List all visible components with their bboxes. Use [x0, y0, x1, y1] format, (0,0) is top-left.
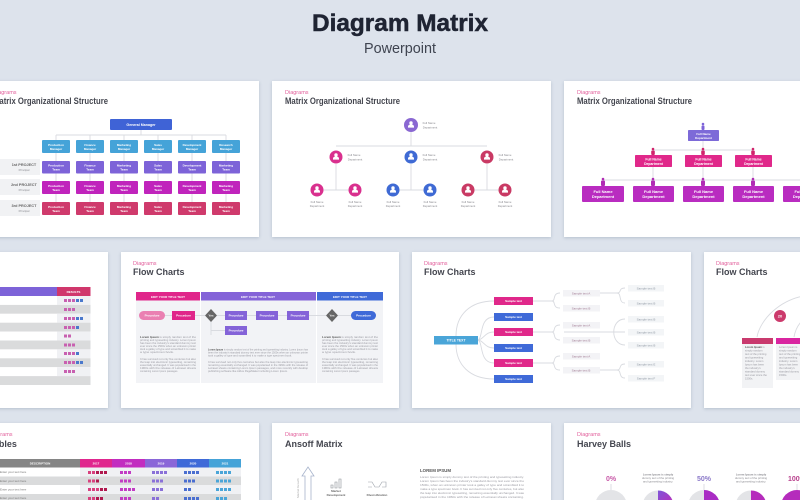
- column two: and typesetting: [779, 356, 798, 360]
- sample text level three: Sample text F: [637, 376, 655, 380]
- row labels: Principal: [19, 209, 30, 213]
- second level nodes: [330, 150, 514, 164]
- subtitle: Powerpoint: [364, 41, 436, 57]
- sample text level three: Sample text B: [637, 330, 655, 334]
- column one: 1500s.: [745, 376, 753, 380]
- sample boxes pink: Sample text: [505, 299, 522, 303]
- text block left: [140, 335, 197, 373]
- table rows: Enter your text here: [0, 479, 27, 483]
- lorem ipsum text: [420, 468, 525, 499]
- ball captions: dummy text of the printing: [735, 476, 768, 480]
- axis label: Market Growth: [296, 478, 300, 498]
- text block right: It has survived not only five centuries but also: [322, 357, 379, 361]
- text block right: essentially unchanged. It was popularised in the: [322, 363, 378, 367]
- third level nodes: Full Name: [349, 200, 362, 204]
- flow decision diamond: Yes: [208, 314, 214, 318]
- third project row: Team: [120, 209, 128, 213]
- manager row: Research: [219, 143, 233, 147]
- text block left: It has survived not only five centuries but also: [140, 357, 197, 361]
- text block right: a type specimen book.: [322, 350, 356, 354]
- general manager box: [110, 119, 172, 130]
- general manager box: General Manager: [126, 123, 156, 127]
- sample text level three: Sample text B: [637, 286, 655, 290]
- first project row: Team: [86, 168, 94, 172]
- second project row: Team: [154, 188, 162, 192]
- first project row: Marketing: [117, 164, 131, 168]
- manager row: Manager: [152, 147, 165, 151]
- text block left: has been the industry's standard dummy text: [140, 341, 196, 345]
- second project row: Team: [222, 188, 230, 192]
- second level boxes: [635, 155, 772, 167]
- second project row: [42, 181, 240, 194]
- manager row: Production: [48, 143, 64, 147]
- column two: industry. Lorem: [779, 359, 798, 363]
- heading: Harvey Balls: [577, 439, 631, 449]
- heading: Flow Charts: [716, 267, 768, 277]
- third project row: Production: [48, 205, 64, 209]
- title text box: [434, 336, 478, 344]
- text block middle: publishing software like Aldus PageMaker including Lorem Ipsum.: [208, 369, 288, 373]
- second project row: Team: [52, 188, 60, 192]
- column two: Ipsum has been: [779, 362, 799, 366]
- ball captions: [642, 472, 768, 484]
- second project row: Team: [86, 188, 94, 192]
- text block left: containing Lorem Ipsum passages.: [140, 369, 178, 373]
- second project row: Marketing: [117, 184, 131, 188]
- table header: RESULTS: [67, 290, 80, 294]
- heading: Flow Charts: [424, 267, 476, 277]
- sample boxes pink: Sample text: [505, 361, 522, 365]
- heading: Ansoff Matrix: [285, 439, 343, 449]
- swimlane headers: EDIT YOUR TITLE TEXT: [333, 295, 367, 299]
- third level boxes: Department: [692, 194, 715, 199]
- panel: circular org chart slide: [272, 81, 551, 237]
- flow process pink: [172, 311, 195, 320]
- manager row: Manager: [220, 147, 233, 151]
- third level nodes: Department: [310, 204, 325, 208]
- panel: flow chart swimlane slide: [121, 252, 399, 408]
- sample boxes blue: Sample text: [505, 346, 522, 350]
- column one: text ever since the: [745, 373, 767, 377]
- panel: flow chart swimlane slide: Diagrams: [133, 261, 157, 267]
- heading: Matrix Organizational Structure: [285, 96, 400, 106]
- table rows: [0, 296, 90, 385]
- text block middle: It has survived not only five centuries but also the leap into electronic typesetting: [208, 360, 309, 364]
- second project row: Sales: [154, 184, 162, 188]
- table header: 2019: [158, 462, 165, 466]
- manager row: Development: [183, 143, 201, 147]
- manager row: [42, 140, 240, 153]
- ball tick marks: [611, 484, 797, 490]
- third level nodes: Full Name: [499, 200, 512, 204]
- column two: standard dummy: [779, 370, 800, 374]
- ball captions: Lorem Ipsum is simply: [736, 472, 767, 476]
- numbered circle: 20: [778, 314, 783, 318]
- text block left: a type specimen book.: [140, 350, 174, 354]
- row labels: 3rd PROJECT: [12, 204, 37, 208]
- second level boxes: Full Name: [695, 158, 712, 162]
- flow end pill: Procedure: [356, 314, 371, 318]
- text block middle: Lorem Ipsum is simply random text of the printing and typesetting industry. Lorem Ipsum has: [208, 348, 309, 352]
- second level boxes: Department: [744, 162, 764, 166]
- column one: and typesetting: [745, 356, 764, 360]
- text block right: Lorem Ipsum is simply random text of the: [322, 335, 379, 339]
- text block right: [322, 335, 379, 373]
- diversification icon: [367, 482, 387, 497]
- first project row: Team: [154, 168, 162, 172]
- text block left: the leap into electronic typesetting, remaining: [140, 360, 197, 364]
- heading: Matrix Organizational Structure: [577, 96, 692, 106]
- lorem ipsum text: popularised in the 1960s with the release of Letraset sheets containing.: [420, 495, 524, 499]
- third project row: Team: [188, 209, 196, 213]
- panel: ansoff matrix slide: [272, 423, 551, 500]
- third project row: Team: [222, 209, 230, 213]
- second project row: Finance: [84, 184, 96, 188]
- manager row: Manager: [50, 147, 63, 151]
- sample text level two: Sample text B: [572, 338, 590, 342]
- sample boxes blue: Sample text: [505, 377, 522, 381]
- text block right: ever since the 1500s when an unknown printer: [322, 344, 378, 348]
- panel: circular org chart slide: Diagrams: [285, 90, 309, 96]
- third level nodes: Full Name: [311, 200, 324, 204]
- lorem ipsum text: the leap into electronic typesetting, remaining essentially unchanged. It was: [420, 491, 525, 495]
- manager row: Manager: [186, 147, 199, 151]
- third level nodes: [310, 184, 513, 208]
- lorem ipsum text: LOREM IPSUM: [420, 468, 452, 473]
- sample text level two: Sample text B: [572, 368, 590, 372]
- column two: simply random: [779, 348, 797, 352]
- second level nodes: Department: [423, 158, 438, 162]
- third level nodes: Full Name: [424, 200, 437, 204]
- tree connector lines: [323, 132, 499, 190]
- text block middle: [208, 348, 309, 373]
- text block right: 1960s with the release of Letraset sheets: [322, 366, 379, 370]
- table header: [0, 459, 241, 468]
- flow start pill: Procedure: [145, 314, 160, 318]
- sample text level two: Sample text A: [572, 354, 590, 358]
- ball captions: Lorem Ipsum is simply: [643, 472, 674, 476]
- panel: harvey balls slide: [564, 423, 800, 500]
- third level boxes: Full Name: [593, 189, 613, 194]
- sample boxes pink: Sample text: [505, 330, 522, 334]
- swimlane headers: EDIT YOUR TITLE TEXT: [151, 295, 185, 299]
- top box: Full Name: [696, 132, 711, 136]
- lorem ipsum text: 1500s, when an unknown printer took a galley of type and scrambled it to: [420, 483, 525, 487]
- third project row: Marketing: [219, 205, 233, 209]
- column one: industry. Lorem: [745, 359, 764, 363]
- second level nodes: Department: [348, 158, 363, 162]
- row labels: Principal: [19, 168, 30, 172]
- second level boxes: Department: [644, 162, 664, 166]
- flow decision diamond two: Yes: [329, 314, 335, 318]
- panel: results table slide: [0, 252, 108, 408]
- table header: 2018: [125, 462, 132, 466]
- table rows: Enter your text here: [0, 488, 27, 492]
- ball captions: and typesetting industry.: [736, 480, 766, 484]
- flow process purple: Procedure: [260, 314, 275, 318]
- third level nodes: Department: [498, 204, 513, 208]
- column two: 1500s.: [779, 373, 787, 377]
- second project row: Production: [48, 184, 64, 188]
- second project row: Team: [188, 188, 196, 192]
- panel: box org chart slide: [564, 81, 800, 237]
- swimlane headers: [136, 292, 383, 300]
- sample text level two: [563, 290, 600, 374]
- flow process purple: Procedure: [229, 328, 244, 332]
- third level boxes: Full Name: [644, 189, 664, 194]
- ball captions: and typesetting industry.: [643, 480, 673, 484]
- first project row: Team: [120, 168, 128, 172]
- panel: ansoff matrix slide: Diagrams: [285, 432, 309, 438]
- diversification icon: Diversification: [367, 493, 387, 497]
- connector lines: [603, 141, 800, 182]
- third project row: Team: [86, 209, 94, 213]
- flow process purple: [225, 311, 309, 335]
- third project row: Finance: [84, 205, 96, 209]
- first project row: Marketing: [219, 164, 233, 168]
- manager row: Marketing: [117, 143, 131, 147]
- sample text level two: Sample text A: [572, 324, 590, 328]
- row labels: [0, 159, 40, 216]
- text block left: Lorem Ipsum is simply random text of the: [140, 335, 197, 339]
- third project row: Team: [154, 209, 162, 213]
- flow decision diamond: [205, 309, 217, 322]
- panel: harvey balls slide: Diagrams: [577, 432, 601, 438]
- column two: the industry's: [779, 366, 795, 370]
- row labels: 1st PROJECT: [12, 163, 37, 167]
- lorem ipsum text: Lorem Ipsum has been the industry's standard dummy text ever since the: [420, 479, 525, 483]
- text block right: the leap into electronic typesetting, remaining: [322, 360, 379, 364]
- row labels: 2nd PROJECT: [11, 183, 38, 187]
- second level nodes: Full Name: [499, 153, 512, 157]
- ball 25 percent: [642, 490, 674, 500]
- column one: simply random: [745, 348, 763, 352]
- text block left: 1960s with the release of Letraset sheets: [140, 366, 197, 370]
- first project row: Team: [222, 168, 230, 172]
- sample text level three: [628, 285, 664, 382]
- sample text level three: Sample text B: [637, 318, 655, 322]
- second level nodes: Full Name: [348, 153, 361, 157]
- table squares: [88, 471, 231, 500]
- third level nodes: Department: [461, 204, 476, 208]
- ball 0 percent: [595, 490, 627, 500]
- second project row: Team: [120, 188, 128, 192]
- swimlane backgrounds: [136, 300, 383, 383]
- ball 75 percent: [736, 490, 766, 500]
- flow process purple: Procedure: [291, 314, 306, 318]
- text block right: has been the industry's standard dummy text: [322, 341, 378, 345]
- column two: Lorem Ipsum is: [779, 345, 798, 349]
- result squares: [64, 299, 75, 373]
- market development icon: [327, 479, 345, 497]
- column one: the industry's: [745, 366, 761, 370]
- first project row: Development: [183, 164, 201, 168]
- percent labels: [606, 476, 800, 483]
- heading: Flow Charts: [133, 267, 185, 277]
- second level nodes: Full Name: [423, 153, 436, 157]
- flow connectors: [165, 316, 351, 335]
- third level boxes: Full Name: [694, 189, 714, 194]
- text block middle: Letraset sheets containing Lorem Ipsum passages, and more recently with desktop: [208, 366, 309, 370]
- first project row: Team: [188, 168, 196, 172]
- sample text level two: Sample text A: [572, 292, 590, 296]
- radial arcs: [757, 295, 800, 337]
- text block left: ever since the 1500s when an unknown printer: [140, 344, 196, 348]
- column one: standard dummy: [745, 370, 766, 374]
- second project row: Marketing: [219, 184, 233, 188]
- lorem ipsum text: Lorem Ipsum is simply dummy text of the printing and typesetting industry.: [420, 475, 524, 479]
- flow decision diamond two: [326, 309, 338, 322]
- third project row: Sales: [154, 205, 162, 209]
- flow end pill: [351, 311, 376, 320]
- panel: box org chart slide: Diagrams: [577, 90, 601, 96]
- flow process pink: Procedure: [176, 314, 191, 318]
- table rows: Enter your text here: [0, 496, 27, 500]
- numbered circle: [774, 310, 786, 322]
- first project row: Finance: [84, 164, 96, 168]
- vertical arrow: [302, 467, 314, 500]
- top box: [688, 130, 719, 141]
- text block middle: been the industry's standard dummy text ever since the 1500s when an unknown printer: [208, 350, 308, 354]
- table header: DESCRIPTION: [30, 462, 50, 466]
- ball 100 percent: [781, 490, 800, 500]
- third level nodes: Department: [348, 204, 363, 208]
- panel: matrix org table slide: [0, 81, 259, 237]
- table header: [0, 287, 90, 296]
- table header: 2021: [222, 462, 229, 466]
- column two: [776, 338, 800, 380]
- text block middle: took a galley of type and scrambled it to make a type specimen book.: [208, 354, 292, 358]
- percent labels: 0%: [606, 476, 617, 483]
- top node: Department: [423, 126, 438, 130]
- third level nodes: Department: [423, 204, 438, 208]
- third level boxes: Department: [642, 194, 665, 199]
- first project row: Production: [48, 164, 64, 168]
- column one: Lorem Ipsum is: [745, 345, 765, 349]
- first project row: Team: [52, 168, 60, 172]
- row labels: Principal: [19, 188, 30, 192]
- connector lines: [56, 130, 226, 202]
- column one: [742, 338, 773, 388]
- text block right: took a galley of type and scrambled it to make: [322, 347, 379, 351]
- market development icon: Market: [331, 489, 341, 493]
- sample text level three: Sample text B: [637, 344, 655, 348]
- panel: tree flow chart slide: [412, 252, 691, 408]
- second project row: Development: [183, 184, 201, 188]
- table rows: [0, 468, 241, 500]
- top box: Department: [695, 136, 712, 140]
- flow start pill: [139, 311, 165, 320]
- third project row: [42, 202, 240, 215]
- ball captions: dummy text of the printing: [642, 476, 675, 480]
- manager row: Manager: [118, 147, 131, 151]
- text block left: essentially unchanged. It was popularised in the: [140, 363, 196, 367]
- first project row: [42, 161, 240, 174]
- second level boxes: Full Name: [645, 158, 662, 162]
- third project row: Marketing: [117, 205, 131, 209]
- third project row: Development: [183, 205, 201, 209]
- third level boxes: Department: [592, 194, 615, 199]
- text block left: printing and typesetting industry. Lorem Ipsum: [140, 338, 197, 342]
- third level boxes: Department: [742, 194, 765, 199]
- table header: 2020: [190, 462, 197, 466]
- second level nodes: Department: [499, 158, 514, 162]
- sample text level three: Sample text B: [637, 302, 655, 306]
- sample text level three: Sample text E: [637, 362, 655, 366]
- top node: [404, 118, 438, 132]
- panel: radial flow chart slide: Diagrams: [716, 261, 740, 267]
- manager row: Finance: [84, 143, 96, 147]
- third project row: Team: [52, 209, 60, 213]
- third level nodes: Full Name: [462, 200, 475, 204]
- panel: tables slide: [0, 423, 259, 500]
- sample boxes blue: Sample text: [505, 315, 522, 319]
- third level boxes: Full Name: [744, 189, 764, 194]
- sample text level two: Sample text B: [572, 306, 590, 310]
- table rows: Enter your text here: [0, 470, 27, 474]
- first project row: Sales: [154, 164, 162, 168]
- manager row: Sales: [154, 143, 162, 147]
- ball 50 percent: [688, 490, 720, 500]
- text block right: containing Lorem Ipsum passages.: [322, 369, 360, 373]
- title: Diagram Matrix: [312, 10, 489, 37]
- third level boxes: [582, 186, 800, 202]
- manager row: Manager: [84, 147, 97, 151]
- column one: text of the printing: [745, 352, 767, 356]
- flow process purple: Procedure: [229, 314, 244, 318]
- second level boxes: Department: [694, 162, 714, 166]
- person icons: [601, 123, 755, 186]
- sample boxes pink: [494, 297, 533, 367]
- second level boxes: Full Name: [745, 158, 762, 162]
- text block middle: remaining essentially unchanged. It was popularised in the 1960s with the release of: [208, 363, 308, 367]
- swimlane headers: EDIT YOUR TITLE TEXT: [241, 295, 275, 299]
- top node: Full Name: [423, 121, 436, 125]
- percent labels: 50%: [697, 476, 712, 483]
- third level nodes: Full Name: [387, 200, 400, 204]
- title text box: TITLE TEXT: [446, 338, 466, 342]
- lorem ipsum text: make a type specimen book. It has survived not only five centuries, but also: [420, 487, 525, 491]
- text block left: took a galley of type and scrambled it to make: [140, 347, 197, 351]
- table header: 2017: [93, 462, 100, 466]
- third level nodes: Department: [386, 204, 401, 208]
- tree connector curves: [456, 288, 625, 379]
- panel: tree flow chart slide: Diagrams: [424, 261, 448, 267]
- sample boxes blue: [494, 313, 533, 383]
- column one: Ipsum has been: [745, 362, 765, 366]
- column two: text of the printing: [779, 352, 800, 356]
- text block right: printing and typesetting industry. Lorem Ipsum: [322, 338, 379, 342]
- market development icon: Development: [327, 493, 345, 497]
- panel: radial flow chart slide: [704, 252, 800, 408]
